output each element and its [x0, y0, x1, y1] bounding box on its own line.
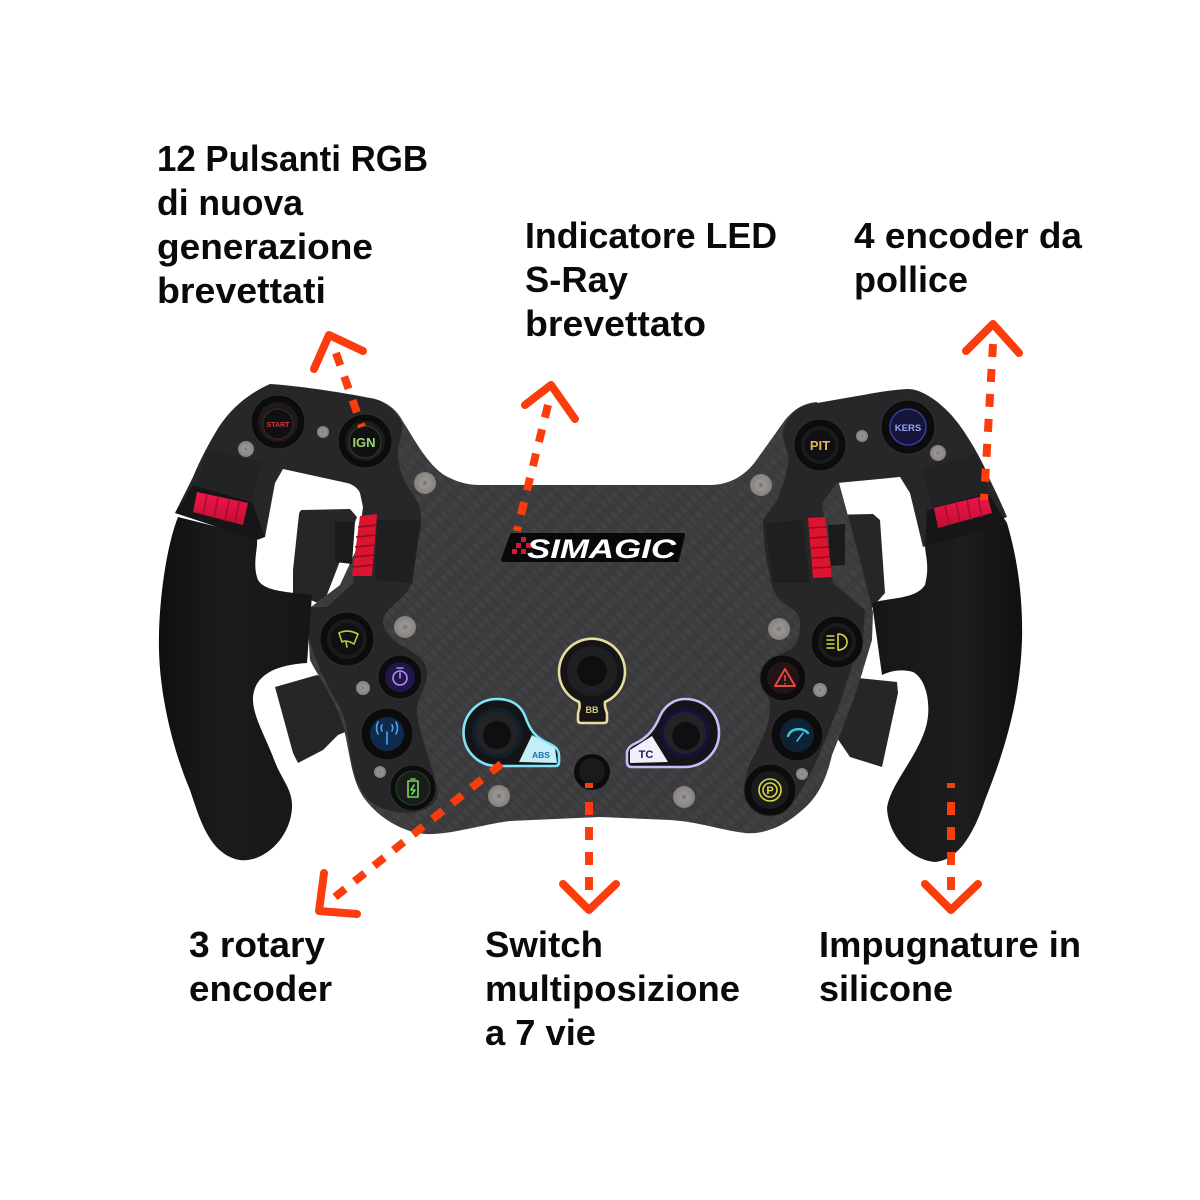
right dark aluminium frame: [746, 389, 1007, 814]
label: 12 Pulsanti RGB: di nuova: [157, 182, 304, 223]
label: 12 Pulsanti RGB: generazione: [157, 226, 373, 267]
button: gauge: [771, 709, 823, 761]
arrow: rotary encoders: [319, 757, 510, 914]
label: Impugnature in silicone: silicone: [819, 968, 953, 1009]
label: 12 Pulsanti RGB: 12 Pulsanti RGB: [157, 138, 428, 179]
left grip: [159, 517, 312, 860]
button: START: START: [267, 422, 290, 429]
right grip: [872, 523, 1022, 862]
left inner encoder: [335, 514, 420, 583]
encoder: TC: TC: [639, 749, 653, 761]
encoder: BB: BB: [586, 705, 599, 715]
label: Switch multiposizione a 7 vie: a 7 vie: [485, 1012, 596, 1053]
arrow: thumb encoders: [966, 324, 1019, 500]
7-way multiposition switch: [574, 754, 610, 790]
steering wheel: [159, 384, 1022, 862]
label: 12 Pulsanti RGB: brevettati: [157, 270, 326, 311]
button: KERS: [881, 400, 935, 454]
label: 3 rotary encoder: encoder: [189, 968, 332, 1009]
Simagic logo: [503, 534, 683, 564]
label: Indicatore LED S-Ray: [525, 215, 777, 344]
left dark aluminium frame: [175, 384, 438, 813]
button: stopwatch: [378, 655, 422, 699]
label: 4 encoder da pollice: [854, 215, 1083, 300]
button: KERS: KERS: [895, 423, 921, 434]
right inner encoder: [765, 517, 845, 583]
panel: carbon plate: [307, 398, 873, 834]
button: PIT: PIT: [810, 438, 830, 453]
button: wiper: [320, 612, 374, 666]
encoder: ABS: ABS: [532, 750, 550, 760]
encoder: TC: [627, 699, 719, 767]
Simagic logo: SIMAGIC: [527, 534, 677, 564]
button: PIT: [794, 419, 846, 471]
encoder: ABS: [463, 699, 559, 766]
screws: [238, 426, 946, 808]
right thumb encoder: [922, 454, 1007, 545]
label: Impugnature in silicone: [819, 924, 1081, 1009]
button: hazard: [760, 655, 806, 701]
button: battery: [390, 765, 436, 811]
arrow: multiposition switch: [563, 783, 616, 910]
arrow: RGB buttons: [314, 335, 363, 427]
arrow: silicone grips: [925, 783, 978, 910]
encoder: BB: [559, 639, 625, 723]
label: Indicatore LED S-Ray: brevettato: [525, 303, 706, 344]
label: Indicatore LED S-Ray: Indicatore LED: [525, 215, 777, 256]
paddles: [275, 509, 898, 767]
label: 3 rotary encoder: [189, 924, 332, 1009]
label: 4 encoder da pollice: pollice: [854, 259, 968, 300]
label: Switch multiposizione a 7 vie: multiposizione: [485, 968, 740, 1009]
button: START: [251, 395, 305, 449]
button: parking brake: P: [766, 785, 774, 797]
button: IGN: IGN: [352, 435, 376, 450]
button: parking brake: [744, 764, 796, 816]
label: Switch multiposizione a 7 vie: Switch: [485, 924, 603, 965]
label: Switch multiposizione a 7 vie: [485, 924, 740, 1053]
button: antenna: [361, 708, 413, 760]
label: Indicatore LED S-Ray: S-Ray: [525, 259, 628, 300]
button: headlight: [811, 616, 863, 668]
arrow: S-Ray LED: [517, 385, 575, 531]
label: 4 encoder da pollice: 4 encoder da: [854, 215, 1083, 256]
button: IGN: [338, 414, 392, 468]
label: 3 rotary encoder: 3 rotary: [189, 924, 325, 965]
label: Impugnature in silicone: Impugnature in: [819, 924, 1081, 965]
left thumb encoder: [175, 449, 265, 540]
label: 12 Pulsanti RGB: [157, 138, 428, 311]
